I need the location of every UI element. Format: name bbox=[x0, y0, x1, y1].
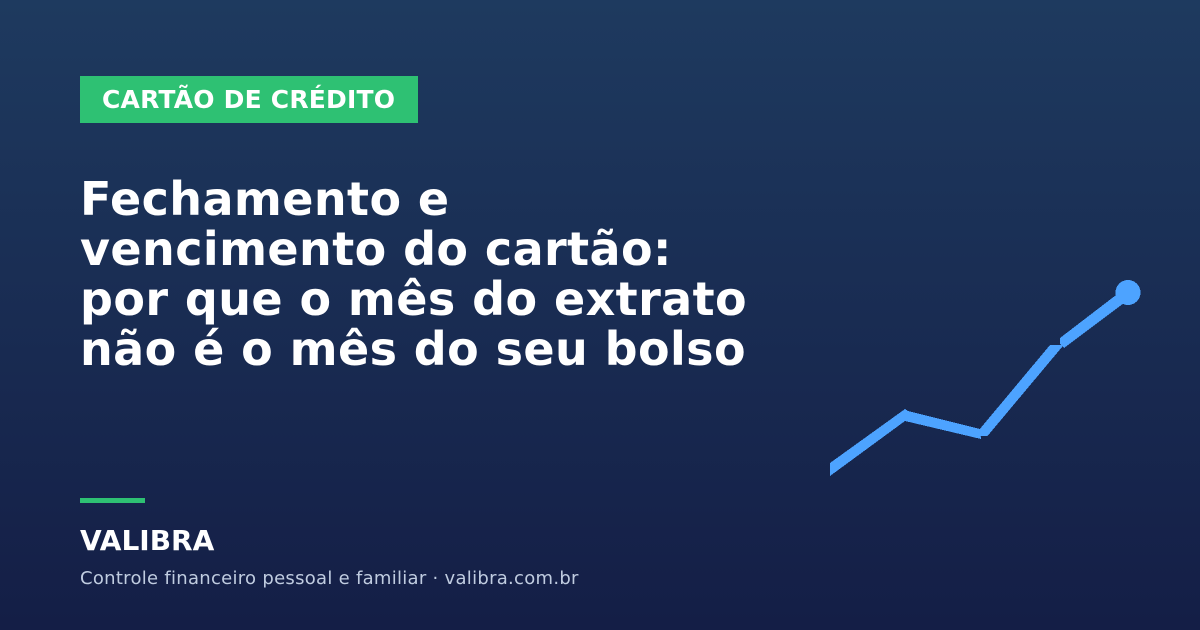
tagline: Controle financeiro pessoal e familiar · valibra.com.br bbox=[80, 568, 579, 589]
chart end point bbox=[1116, 280, 1140, 305]
title: vencimento do cartão: bbox=[80, 222, 672, 276]
accent divider bbox=[80, 498, 145, 503]
brand name: VALIBRA bbox=[80, 524, 214, 557]
title: por que o mês do extrato bbox=[80, 272, 747, 326]
tag label: CARTÃO DE CRÉDITO bbox=[102, 85, 395, 114]
title: não é o mês do seu bolso bbox=[80, 322, 746, 376]
title bbox=[80, 172, 747, 376]
category tag bbox=[80, 76, 418, 123]
title: Fechamento e bbox=[80, 172, 450, 226]
